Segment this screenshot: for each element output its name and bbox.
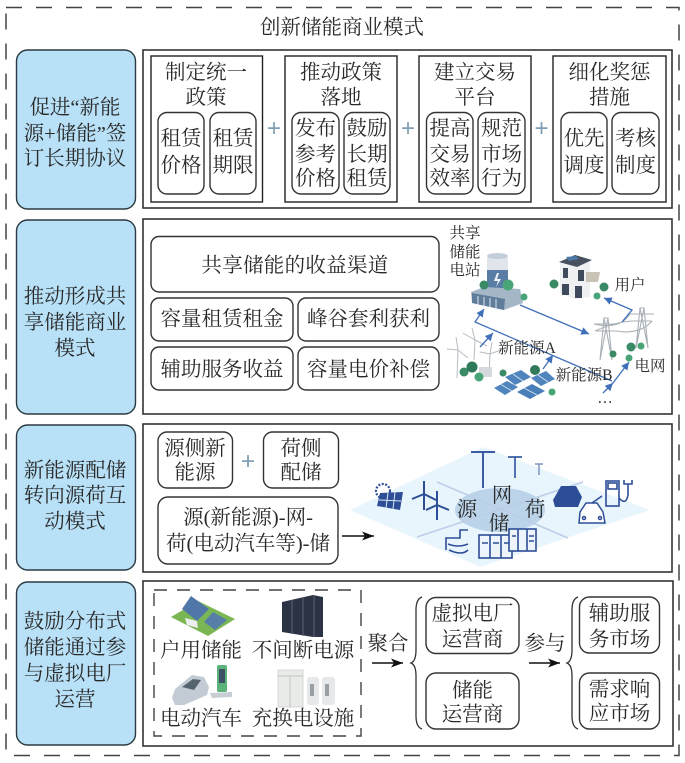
panel: policy measures <box>143 50 672 208</box>
row 2: shared storage <box>16 219 672 414</box>
group: incentives: 制度 <box>615 154 656 177</box>
ancillary services: 辅助服务收益 <box>160 358 284 381</box>
source grid load storage: 荷(电动汽车等)-储 <box>166 532 330 555</box>
group: policy implementation: 长期 <box>346 143 388 166</box>
group: unified policy <box>151 56 262 202</box>
diagram labels: 新能源B <box>556 366 612 384</box>
demand response market: 应市场 <box>589 702 650 725</box>
source-side renewable: 源侧新 <box>164 437 226 460</box>
icon: user house <box>550 255 608 300</box>
label: virtual power plant: 运营 <box>54 688 96 711</box>
label: virtual power plant: 储能通过参 <box>24 636 126 659</box>
icon: utility poles <box>471 452 543 488</box>
group: trading platform: 规范 <box>481 117 522 140</box>
ancillary services <box>151 347 293 390</box>
group: trading platform: 提高 <box>430 117 470 140</box>
icon: shared storage station <box>471 253 528 310</box>
text: 电动汽车 <box>160 707 242 730</box>
diagram labels <box>449 224 666 407</box>
label: source-load interaction <box>16 425 136 570</box>
capacity price subsidy <box>298 347 439 390</box>
icon: solar panel <box>376 484 403 510</box>
group: policy implementation: 鼓励 <box>346 117 388 140</box>
diagram labels: 用户 <box>614 276 646 294</box>
panel: storage shift <box>143 424 672 572</box>
diagram labels: 电网 <box>634 357 666 375</box>
group: trading platform: 交易 <box>430 143 470 166</box>
icon: battery swap facilities <box>278 670 335 707</box>
group: unified policy: 制定统一 <box>165 61 247 84</box>
diagram labels <box>457 485 545 535</box>
icon: house <box>553 486 582 507</box>
virtual plant operator: 虚拟电厂 <box>432 602 514 625</box>
icon: UPS cabinets <box>282 595 323 637</box>
icon: wind turbines <box>447 328 501 382</box>
group: policy implementation: 参考 <box>295 143 336 166</box>
label: source-load interaction: 新能源配储 <box>24 459 127 482</box>
group: incentives: 细化奖惩 <box>568 61 651 84</box>
arrows: energy flows <box>475 298 632 393</box>
group: incentives: 考核 <box>615 127 656 150</box>
icon: battery cabinets <box>479 529 536 558</box>
diagram: source grid load storage diamond <box>350 447 650 567</box>
ancillary service market: 务市场 <box>589 628 650 651</box>
virtual plant operator: 运营商 <box>442 628 503 651</box>
load-side storage: 荷侧 <box>280 437 322 460</box>
demand response market: 需求响 <box>589 678 650 701</box>
diagram labels: 网 <box>492 485 512 507</box>
label: virtual power plant <box>16 582 136 745</box>
virtual plant operator <box>426 598 519 654</box>
label: shared storage model: 享储能商业 <box>24 311 126 334</box>
capacity price subsidy: 容量电价补偿 <box>307 358 430 381</box>
participation label and arrow: 参与 <box>524 632 566 655</box>
capacity leasing <box>151 298 293 341</box>
group: unified policy: 价格 <box>160 154 202 177</box>
capacity leasing: 容量租赁租金 <box>160 308 284 330</box>
group: trading platform: 行为 <box>481 167 522 190</box>
label: virtual power plant: 与虚拟电厂 <box>24 662 126 685</box>
label: virtual power plant: 鼓励分布式 <box>24 610 126 633</box>
group: unified policy: 期限 <box>212 154 254 177</box>
group: policy implementation: 租赁 <box>346 167 389 190</box>
row 3: source-load interaction <box>16 424 672 572</box>
row 1: long-term agreement <box>16 50 672 209</box>
panel: aggregation <box>143 581 673 746</box>
icon: charger <box>606 480 632 506</box>
diagram labels: 源 <box>457 498 478 521</box>
group: policy implementation <box>285 56 397 202</box>
source-side renewable: 能源 <box>174 461 216 484</box>
plus sign: + <box>401 115 415 142</box>
diagram labels: … <box>597 390 613 407</box>
source-side renewable <box>158 432 232 488</box>
group: policy implementation: 落地 <box>320 86 362 109</box>
storage operator: 运营商 <box>442 703 503 726</box>
group: trading platform: 建立交易 <box>434 61 516 84</box>
group: policy implementation: 推动政策 <box>300 61 382 84</box>
diagram labels: 电站 <box>449 261 481 279</box>
group: unified policy: 政策 <box>186 86 226 109</box>
diagram labels: 储 <box>489 512 510 535</box>
icon: solar field <box>494 365 556 399</box>
demand response market <box>580 673 660 729</box>
plus sign: + <box>241 448 255 475</box>
plus sign: + <box>534 115 549 142</box>
revenue channel heading: 共享储能的收益渠道 <box>201 254 389 277</box>
source grid load storage <box>158 497 338 564</box>
icon: household solar storage <box>171 596 235 636</box>
label: source-load interaction: 动模式 <box>44 510 106 533</box>
row 4: virtual power plant <box>16 581 673 746</box>
storage operator: 储能 <box>452 679 493 702</box>
ancillary service market <box>580 597 660 653</box>
text: 不间断电源 <box>252 639 355 662</box>
group: unified policy: 租赁 <box>212 127 255 150</box>
diagram labels: 共享 <box>449 224 481 242</box>
peak valley arbitrage: 峰谷套利获利 <box>307 308 430 330</box>
group: trading platform: 平台 <box>454 86 496 109</box>
icon: wind turbines <box>412 481 449 520</box>
diagram labels: 荷 <box>525 498 545 521</box>
title: 创新储能商业模式 <box>260 16 424 39</box>
diagram labels: 储能 <box>449 243 481 261</box>
panel: shared storage revenue <box>143 219 672 414</box>
group: incentives: 优先 <box>564 127 604 150</box>
icon: electric car and charger <box>172 665 232 705</box>
group: trading platform: 效率 <box>430 167 470 190</box>
aggregation label and arrow: 聚合 <box>368 632 408 655</box>
peak valley arbitrage <box>298 298 439 341</box>
label: long-term agreement: 促进“新能 <box>29 96 121 119</box>
brace <box>411 597 422 729</box>
group: incentives: 措施 <box>589 86 630 109</box>
load-side storage <box>264 432 338 488</box>
label: shared storage model <box>16 220 136 414</box>
icon: grid towers <box>594 308 654 362</box>
label: long-term agreement <box>16 50 136 209</box>
label: shared storage model: 模式 <box>54 337 96 360</box>
distributed resources group <box>154 590 361 736</box>
load-side storage: 配储 <box>280 461 322 484</box>
plus sign: + <box>267 115 281 142</box>
icon: electric car <box>579 496 605 523</box>
revenue channel heading <box>151 236 439 292</box>
group: incentives: 调度 <box>564 154 604 177</box>
group: incentives <box>553 56 666 202</box>
brace <box>567 597 578 729</box>
diagram labels: 新能源A <box>498 339 557 357</box>
source grid load storage: 源(新能源)-网- <box>183 506 313 529</box>
label: shared storage model: 推动形成共 <box>24 285 126 308</box>
ancillary service market: 辅助服 <box>589 602 651 625</box>
label: long-term agreement: 源+储能”签 <box>24 122 126 145</box>
icon: pumped storage <box>446 530 468 553</box>
storage operator <box>426 673 519 729</box>
group: policy implementation: 发布 <box>295 117 336 140</box>
text: 户用储能 <box>160 639 242 662</box>
group: trading platform: 市场 <box>481 143 522 166</box>
group: trading platform <box>419 56 531 202</box>
arrow <box>342 535 374 537</box>
group: policy implementation: 价格 <box>295 167 336 190</box>
text: 充换电设施 <box>252 707 354 730</box>
label: long-term agreement: 订长期协议 <box>24 147 126 170</box>
label: source-load interaction: 转向源荷互 <box>24 484 126 507</box>
group: unified policy: 租赁 <box>160 127 203 150</box>
